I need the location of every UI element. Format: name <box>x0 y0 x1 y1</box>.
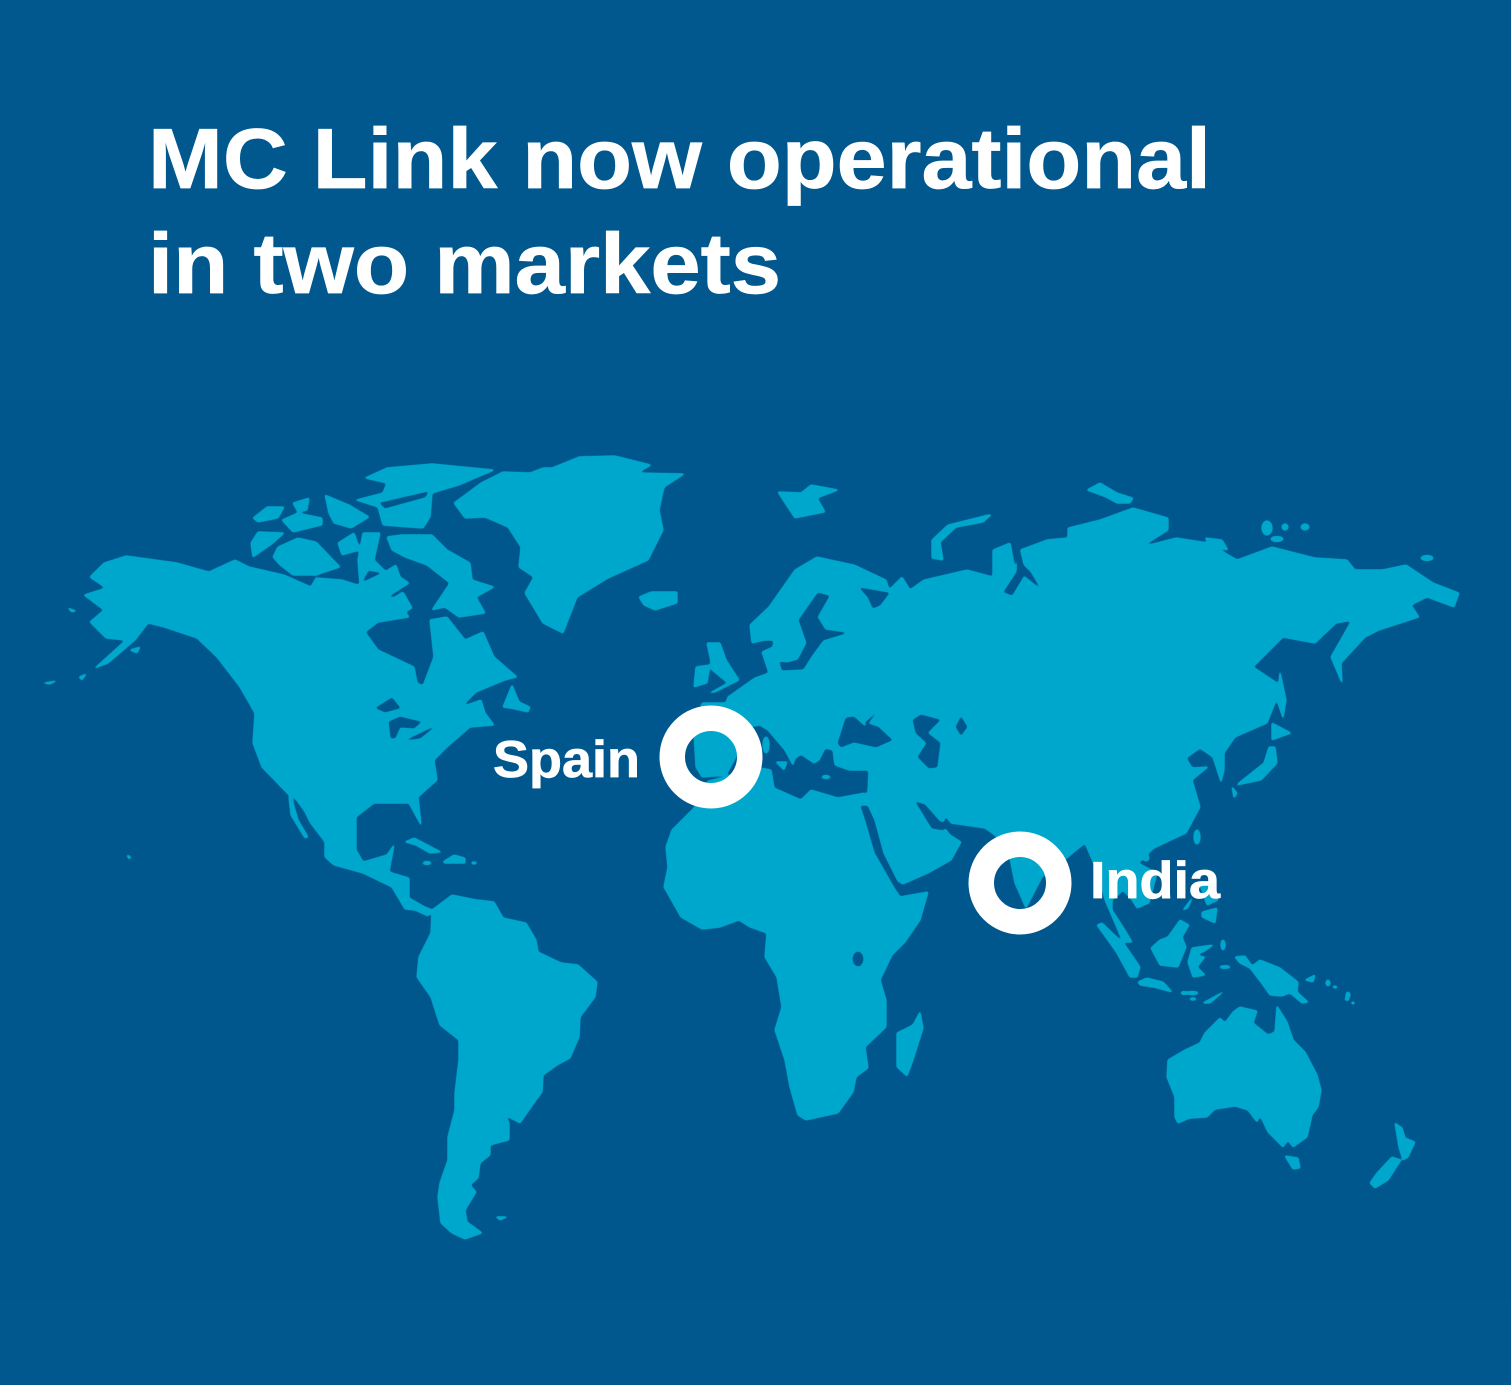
map: Eurasia <box>694 483 1459 942</box>
small Pacific and Alaskan islands <box>130 647 140 653</box>
Caribbean <box>405 838 441 853</box>
map: Greenland <box>454 456 684 633</box>
map: South America <box>417 895 597 1239</box>
map: North America <box>44 464 530 916</box>
Arctic islands <box>251 532 284 557</box>
title <box>148 112 1211 312</box>
Newfoundland <box>503 685 530 712</box>
map: Africa <box>664 768 928 1120</box>
Japan, Sakhalin and Taiwan <box>1277 672 1286 718</box>
map: Australia and New Zealand <box>1167 1006 1415 1188</box>
marker: Spain ring <box>672 718 750 796</box>
world map <box>44 456 1459 1239</box>
marker: India ring <box>981 844 1059 922</box>
Arctic Eurasian islands <box>932 515 991 560</box>
map: Maritime Southeast Asia <box>1097 883 1354 1004</box>
label: India: India <box>1090 852 1221 910</box>
map: Iceland <box>639 592 677 610</box>
Great Lakes <box>376 698 400 712</box>
label: Spain: Spain <box>493 731 640 789</box>
title: MC Link now operational <box>148 112 1211 207</box>
Baja California <box>289 797 308 838</box>
inland seas <box>780 593 846 670</box>
title: in two markets <box>148 217 781 312</box>
European and Mediterranean islands <box>707 643 739 693</box>
